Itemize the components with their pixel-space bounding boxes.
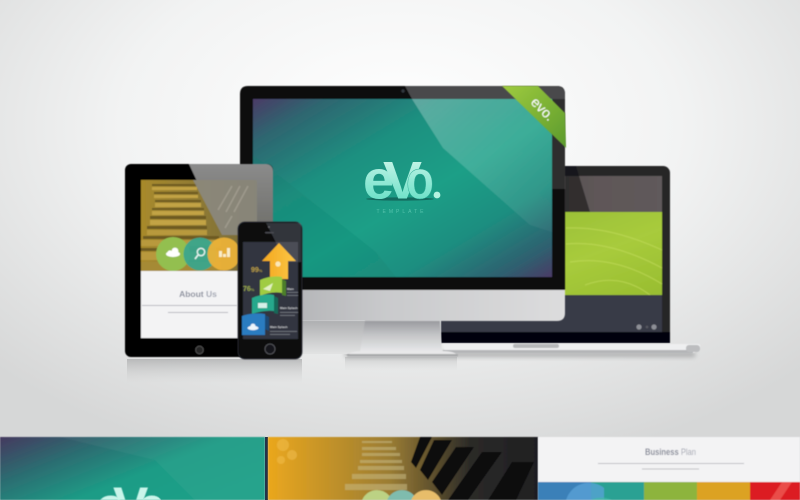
gold slide floral texture: [277, 439, 297, 464]
laptop base: [443, 344, 700, 353]
laptop lower bezel: [441, 332, 670, 343]
monitor stand: [360, 321, 442, 352]
phone body: [238, 222, 302, 359]
laptop base shade: [443, 350, 693, 353]
phone camera: [268, 226, 270, 228]
arrow: [262, 243, 296, 279]
laptop green wave lines: [566, 228, 662, 295]
logo wordmark: V: [383, 152, 422, 210]
tablet screen reflection: [193, 180, 257, 235]
tablet white panel: [141, 271, 257, 338]
laptop base corner: [686, 345, 700, 352]
laptop lid: [441, 166, 670, 343]
tablet: [125, 164, 273, 357]
ribbon text: evo.: [528, 94, 558, 124]
99 percent: 99%: [251, 267, 263, 274]
gold slide background: [268, 437, 538, 500]
gold slide stairs: [345, 441, 407, 490]
phone label 2: Main Splash: [280, 306, 298, 310]
phone home button: [265, 344, 275, 354]
tablet circle: search: [184, 238, 216, 270]
monitor chin: [240, 280, 565, 321]
blue step: [242, 313, 269, 335]
wall shadow under monitor chin: [300, 321, 366, 354]
ribbon band: [502, 86, 566, 148]
monitor stand base edge: [347, 354, 458, 356]
laptop top-left dark glare: [565, 166, 590, 212]
phone top glare: [266, 223, 301, 262]
tablet glare on frame: [188, 163, 274, 222]
screen shadow band: [253, 155, 396, 277]
laptop screen: green band: [441, 212, 662, 295]
phone speaker: [265, 232, 274, 233]
phone label 1: Main: [287, 287, 294, 291]
logo wordmark: e: [363, 148, 394, 210]
laptop screen: dark band: [441, 295, 662, 332]
tablet body text: [142, 305, 237, 313]
76 percent: 76%: [243, 286, 255, 293]
tablet heading: About Us: [179, 289, 217, 299]
phone label 3: Main Splash: [270, 325, 288, 329]
tablet body: [125, 164, 273, 357]
teal step: [252, 294, 278, 314]
colour columns: [538, 482, 800, 500]
logo shadow: [366, 197, 434, 201]
slide text lines: [598, 463, 744, 470]
smartphone: [238, 222, 302, 359]
logo wordmark: o: [406, 148, 434, 210]
laptop screen: brown band: [441, 176, 662, 212]
teal slide background: [0, 437, 265, 500]
corner ribbon: [502, 86, 566, 148]
bottom strip: gold slide: [268, 437, 538, 500]
bottom strip: teal slide: [0, 437, 265, 500]
monitor bezel glare: [405, 86, 565, 99]
slide heading: Business Plan: [645, 447, 696, 458]
teal slide shine: [60, 437, 265, 500]
monitor stand base: [347, 351, 458, 356]
logo subtitle: TEMPLATE: [376, 209, 427, 215]
camera: [401, 89, 405, 93]
logo wordmark: [363, 148, 440, 210]
desktop monitor: [240, 86, 565, 356]
screen shine: [412, 99, 552, 232]
laptop: [441, 166, 700, 353]
arrow icon: [275, 261, 281, 267]
laptop notch: [513, 344, 559, 348]
tablet reflection streaks: [218, 186, 248, 228]
laptop pagination dots: [636, 324, 657, 330]
divider between slides: [265, 437, 268, 500]
monitor screen: [253, 99, 552, 277]
tablet photo stairs: [141, 184, 221, 271]
monitor right bezel glare: [552, 99, 565, 189]
eVo logo: [363, 148, 440, 215]
tablet circle: chart: [208, 238, 240, 270]
monitor bezel: [240, 86, 565, 290]
tablet circle: cloud: [156, 237, 190, 271]
gold slide chairs: [411, 437, 534, 500]
device reflections: [127, 352, 695, 383]
tablet photo: [141, 180, 257, 271]
slide background: [538, 437, 800, 482]
gold slide circles: [362, 490, 441, 500]
green step: [260, 276, 286, 296]
tablet home button: [196, 346, 203, 354]
bottom strip: business plan slide: [538, 437, 800, 500]
phone screen: [243, 242, 298, 339]
